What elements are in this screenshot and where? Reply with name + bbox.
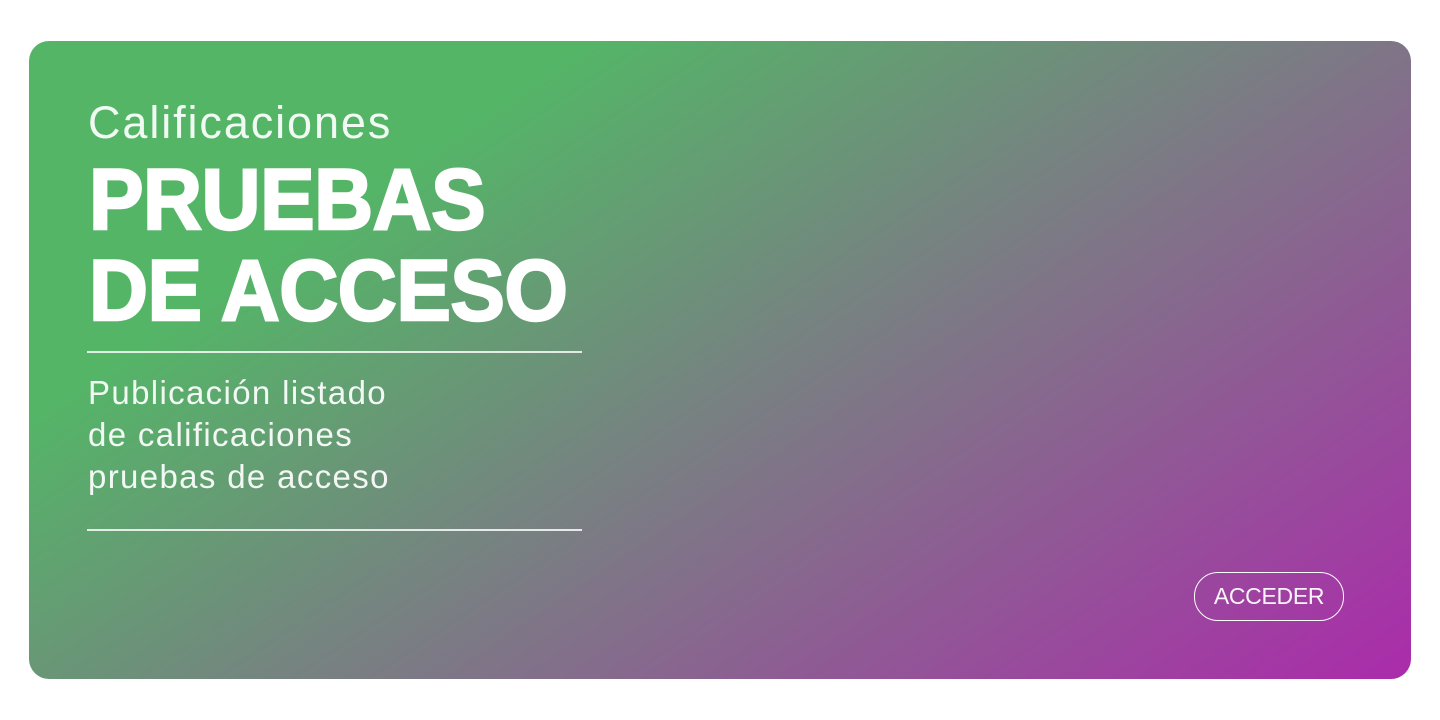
text block: description: pruebas de acceso: [88, 458, 390, 495]
text block: description: de calificaciones: [88, 416, 353, 453]
text block: description: Publicación listado: [88, 374, 387, 411]
button: Acceder: [1194, 572, 1344, 621]
title: Pruebas de acceso: [88, 152, 567, 339]
title: Pruebas de acceso: PRUEBAS: [88, 152, 485, 248]
subtitle: Calificaciones: Calificaciones: [88, 97, 392, 148]
divider bottom: [87, 529, 582, 531]
divider top: [87, 351, 582, 353]
text block: description: [88, 374, 390, 495]
button: Acceder: ACCEDER: [1214, 583, 1324, 609]
title: Pruebas de acceso: DE ACCESO: [88, 243, 567, 339]
